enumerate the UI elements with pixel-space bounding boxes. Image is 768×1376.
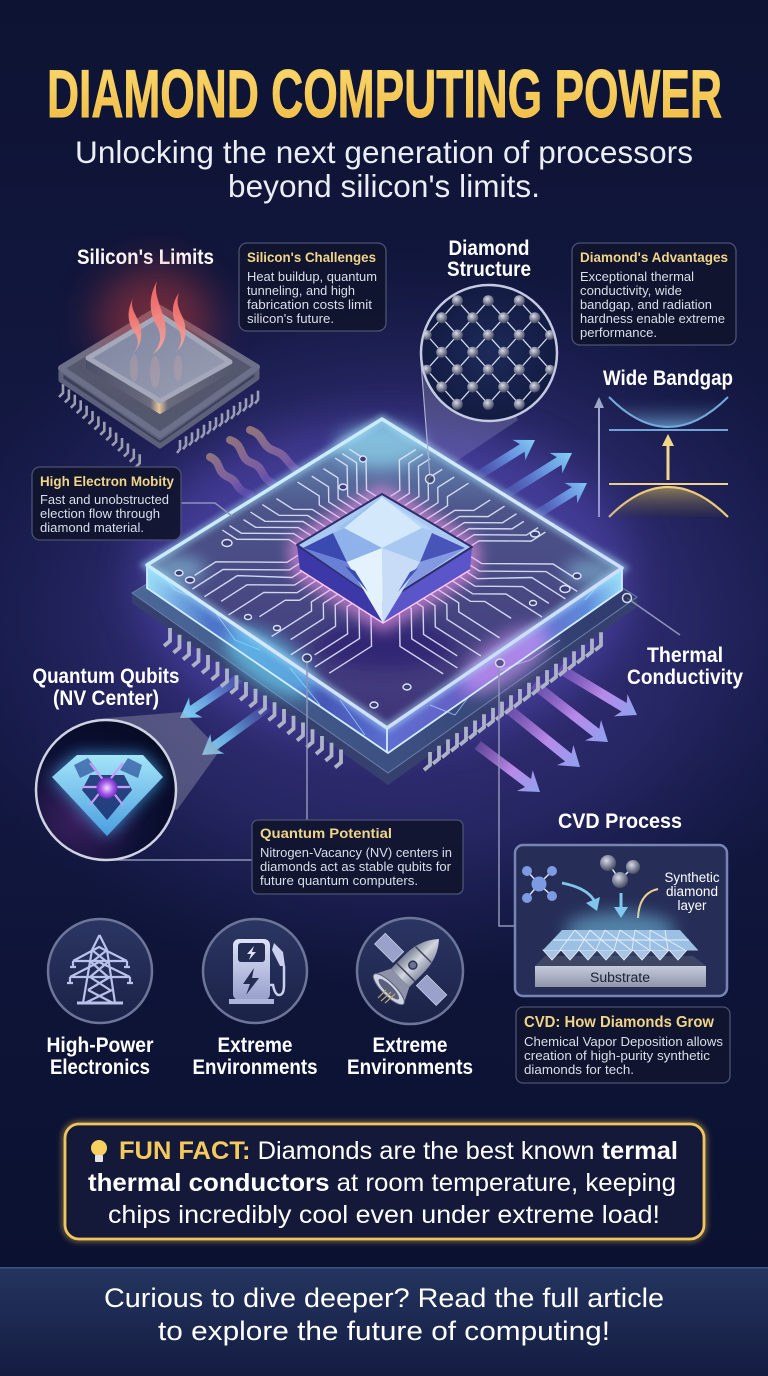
callout: Diamond's Advantages xyxy=(572,243,736,345)
die glow xyxy=(297,494,472,623)
magnifier beam: NV center xyxy=(95,712,220,810)
glass edge xyxy=(147,419,622,728)
callout: Diamond's Advantages: Diamond's Advantages xyxy=(580,249,728,265)
callout: fun fact xyxy=(65,1124,704,1239)
label: Extreme Environments 2 xyxy=(347,1034,473,1079)
footer call to action: Curious to dive deeper? Read the full article xyxy=(104,1283,664,1313)
footer call to action: to explore the future of computing! xyxy=(158,1316,610,1346)
label: High-Power Electronics xyxy=(46,1034,154,1079)
package pins xyxy=(164,628,601,770)
callout: Diamond's Advantages: hardness enable extreme xyxy=(580,311,725,326)
label: Extreme Environments 2: Extreme xyxy=(372,1034,448,1057)
callout: High Electron Mobity: Fast and unobstructed xyxy=(40,492,169,507)
callout: Silicon's Challenges: fabrication costs limit xyxy=(247,297,372,312)
leader line to CVD panel xyxy=(496,659,516,926)
label: Extreme Environments 2: Environments xyxy=(347,1056,473,1079)
panel: CVD process xyxy=(515,845,727,996)
callout: Diamond's Advantages: conductivity, wide xyxy=(580,283,682,298)
substrate: Substrate xyxy=(590,970,650,985)
fun fact text: chips incredibly cool even under extreme load! xyxy=(108,1201,660,1229)
fun fact text xyxy=(88,1137,678,1229)
magnifier leader: diamond structure xyxy=(421,362,434,484)
callout: Quantum Potential: Quantum Potential xyxy=(260,825,392,841)
center diamond xyxy=(297,494,472,623)
label: Extreme Environments 1: Environments xyxy=(192,1056,318,1079)
callout: High Electron Mobity: High Electron Mobity xyxy=(40,473,174,489)
heading: Diamond Structure: Diamond xyxy=(448,237,530,260)
callout: Diamond's Advantages: Exceptional thermal xyxy=(580,269,694,284)
callout: High Electron Mobity xyxy=(32,467,232,540)
arrow: curved xyxy=(562,883,600,911)
heading: Thermal Conductivity xyxy=(622,594,743,689)
callout: Silicon's Challenges: tunneling, and high xyxy=(247,283,355,298)
callout: Quantum Potential: Nitrogen-Vacancy (NV) centers in xyxy=(260,845,452,860)
heading: CVD Process: CVD Process xyxy=(558,810,682,833)
subtitle xyxy=(75,134,693,204)
arrows: heat out to upper right xyxy=(469,430,593,527)
lattice circle: diamond structure xyxy=(421,285,557,421)
molecule: carbon xyxy=(600,855,640,888)
callout: Silicon's Challenges: Heat buildup, quantum xyxy=(247,269,377,284)
label: High-Power Electronics: Electronics xyxy=(50,1056,150,1079)
heading: Diamond Structure: Structure xyxy=(447,258,531,281)
callout: CVD How Diamonds Grow: Chemical Vapor Deposition allows xyxy=(524,1034,724,1049)
callout: Quantum Potential: diamonds act as stable qubits for xyxy=(260,859,452,874)
heading: Silicon's Limits: Silicon's Limits xyxy=(77,246,214,269)
callout: Silicon's Challenges: Silicon's Challenges xyxy=(247,249,376,265)
icon: spacecraft xyxy=(354,909,471,1026)
diamond layer xyxy=(543,912,698,960)
label: synthetic diamond layer xyxy=(638,870,720,918)
NV center circle xyxy=(36,720,252,860)
heading: Thermal Conductivity: Thermal xyxy=(647,644,723,667)
label: synthetic diamond layer: Synthetic xyxy=(664,870,720,885)
substrate xyxy=(535,956,706,987)
callout: CVD How Diamonds Grow xyxy=(516,1007,730,1083)
fun fact text: thermal conductors at room temperature, keeping xyxy=(88,1169,676,1197)
label: synthetic diamond layer: diamond xyxy=(666,884,718,899)
label: Extreme Environments 1 xyxy=(192,1034,318,1079)
icon: power pylon xyxy=(48,919,152,1023)
callout: Quantum Potential: future quantum computers. xyxy=(260,873,418,888)
icon: light bulb xyxy=(91,1140,107,1162)
icon: charging pump xyxy=(203,919,307,1023)
callout: Silicon's Challenges xyxy=(239,243,386,331)
heading: Quantum Qubits: Quantum Qubits xyxy=(32,665,180,688)
subtitle: beyond silicon's limits. xyxy=(228,168,540,204)
glass faces xyxy=(147,565,622,753)
molecule: blue xyxy=(522,866,557,903)
diagram: wide bandgap xyxy=(594,367,733,517)
label: Extreme Environments 1: Extreme xyxy=(218,1034,292,1057)
fun fact text: FUN FACT: Diamonds are the best known termal xyxy=(119,1137,678,1165)
heading: Quantum Qubits xyxy=(32,665,180,710)
icon: overheating silicon chip xyxy=(59,268,258,467)
main diamond chip xyxy=(132,419,637,785)
diagram: wide bandgap: Wide Bandgap xyxy=(603,367,733,390)
callout: Silicon's Challenges: silicon's future. xyxy=(247,311,334,326)
trace pads xyxy=(175,456,581,708)
circuit traces xyxy=(159,428,610,716)
heading: Quantum Qubits: (NV Center) xyxy=(53,687,159,710)
heat waves from silicon chip xyxy=(210,430,310,494)
callout: High Electron Mobity: diamond material. xyxy=(40,520,144,535)
arrow: down xyxy=(614,893,628,918)
label: High-Power Electronics: High-Power xyxy=(46,1034,154,1057)
callout: Diamond's Advantages: performance. xyxy=(580,325,657,340)
substrate xyxy=(132,440,637,785)
callout: CVD How Diamonds Grow: CVD: How Diamonds Grow xyxy=(524,1014,715,1031)
callout: CVD How Diamonds Grow: creation of high-purity synthetic xyxy=(524,1048,711,1063)
subtitle: Unlocking the next generation of processors xyxy=(75,134,693,170)
arrows: heat out to lower left xyxy=(173,663,275,765)
heading: Thermal Conductivity: Conductivity xyxy=(627,666,743,689)
magnifier beam: diamond structure xyxy=(422,355,518,479)
callout: Quantum Potential xyxy=(252,654,463,894)
heading: Diamond Structure xyxy=(447,237,531,281)
arrows: heat out to lower right xyxy=(470,658,644,802)
glass top xyxy=(147,419,622,728)
callout: CVD How Diamonds Grow: diamonds for tech. xyxy=(524,1062,634,1077)
footer call to action xyxy=(0,1267,768,1376)
label: synthetic diamond layer: layer xyxy=(678,898,707,913)
glow bands on glass xyxy=(150,424,620,711)
callout: High Electron Mobity: election flow through xyxy=(40,506,160,521)
callout: Diamond's Advantages: bandgap, and radiation xyxy=(580,297,712,312)
